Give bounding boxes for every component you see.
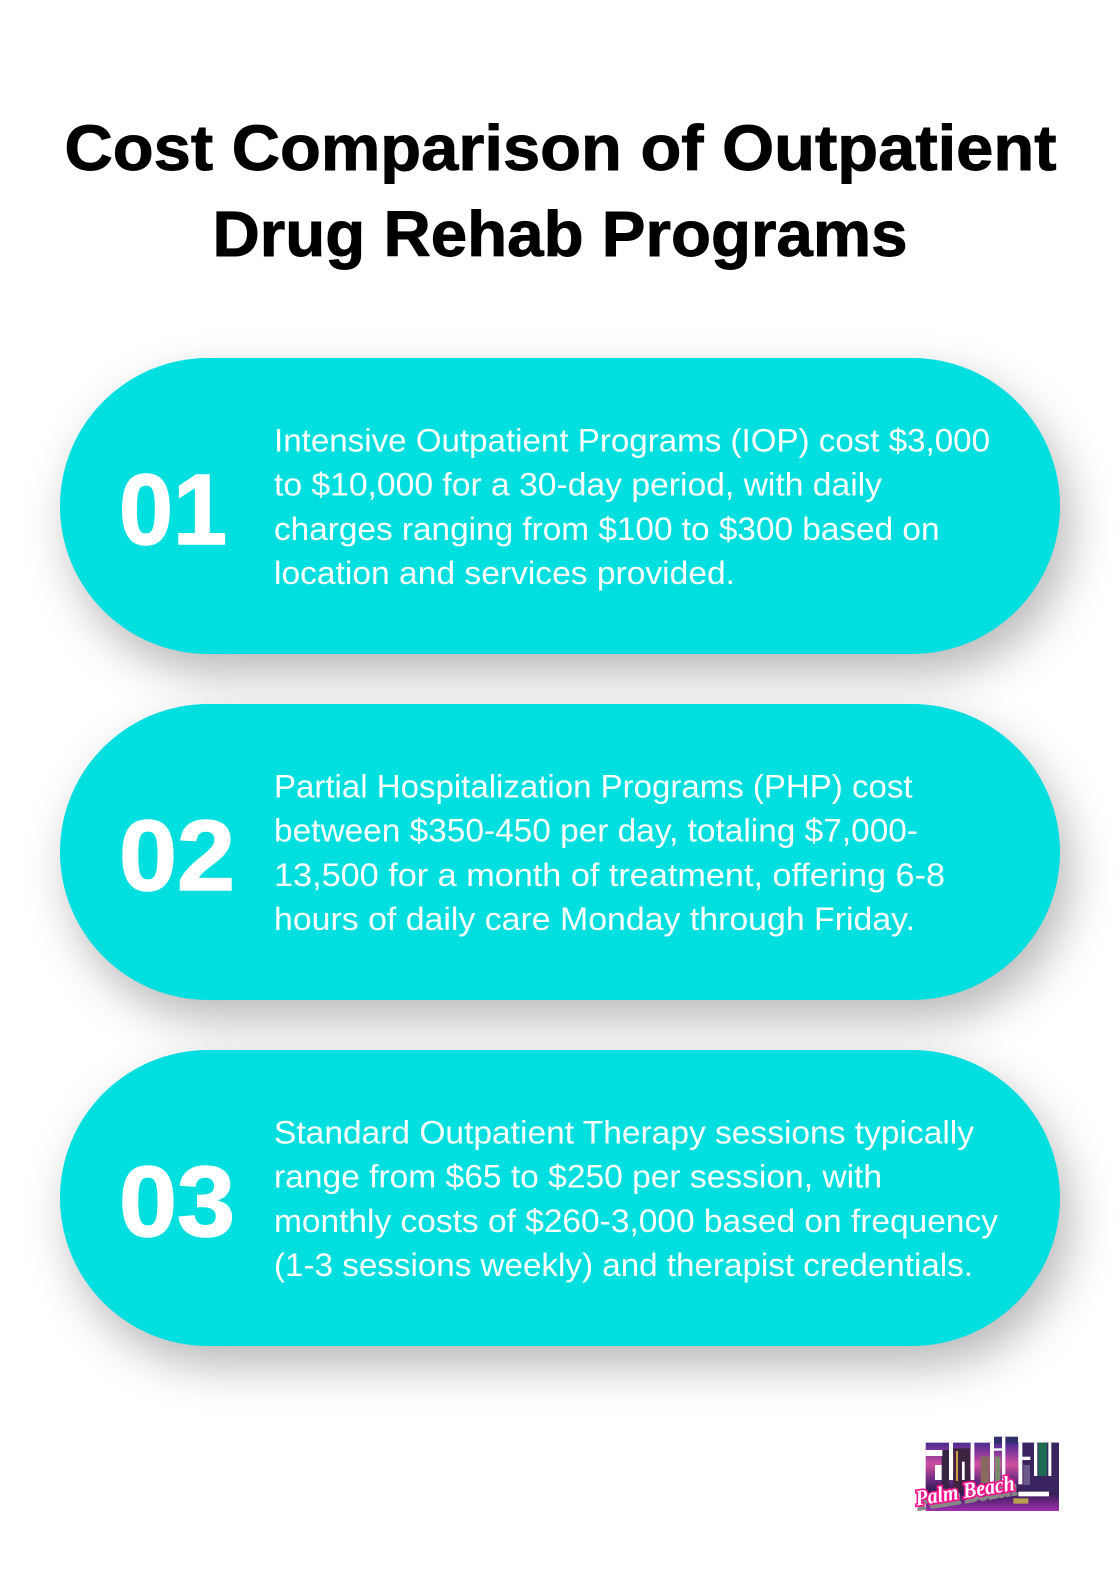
panel: step 01 intensive outpatient programs [60, 358, 1060, 654]
title [64, 112, 1056, 270]
text block: IOP cost: location and services provided. [274, 555, 735, 591]
text block: IOP cost: to $10,000 for a 30-day period, with daily [274, 467, 883, 503]
text block: standard outpatient cost: Standard Outpatient Therapy sessions typically [274, 1115, 975, 1151]
text block: PHP cost [274, 769, 945, 937]
text block: PHP cost: hours of daily care Monday through Friday. [274, 901, 915, 937]
step number 01: 01 [119, 454, 227, 566]
panel: step 02 partial hospitalization programs [60, 704, 1060, 1000]
text block: PHP cost: between $350-450 per day, totaling $7,000- [274, 813, 918, 849]
text block: standard outpatient cost [274, 1115, 999, 1283]
text block: IOP cost: charges ranging from $100 to $300 based on [274, 511, 940, 547]
text block: standard outpatient cost: monthly costs of $260-3,000 based on frequency [274, 1203, 999, 1239]
text block: standard outpatient cost: (1-3 sessions weekly) and therapist credentials. [274, 1247, 973, 1283]
title: Cost Comparison of Outpatient [64, 112, 1056, 184]
step number 03: 03 [119, 1146, 235, 1258]
step number 02: 02 [119, 800, 235, 912]
text block: IOP cost: Intensive Outpatient Programs (IOP) cost $3,000 [274, 423, 990, 459]
logo: Amity Palm Beach [913, 1436, 1059, 1515]
text block: standard outpatient cost: range from $65 to $250 per session, with [274, 1159, 882, 1195]
text block: PHP cost: 13,500 for a month of treatment, offering 6-8 [274, 857, 945, 893]
text block: IOP cost [274, 423, 990, 591]
panel: step 03 standard outpatient therapy [60, 1050, 1060, 1346]
title: Drug Rehab Programs [212, 198, 907, 270]
logo: Amity Palm Beach: Palm Beach [915, 1474, 1018, 1515]
logo: Amity Palm Beach: Palm Beach [913, 1470, 1016, 1511]
text block: PHP cost: Partial Hospitalization Programs (PHP) cost [274, 769, 912, 805]
